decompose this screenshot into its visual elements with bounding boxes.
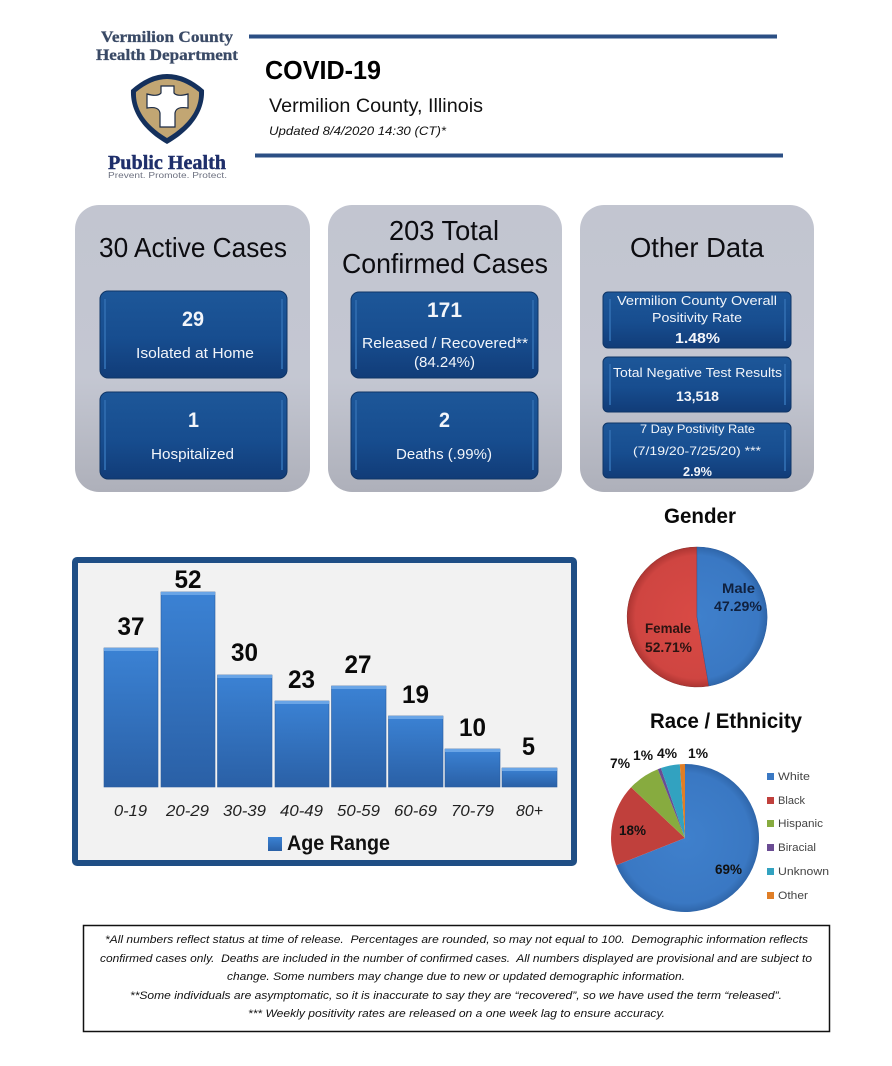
- stat box: released / recovered: (84.24%): [414, 355, 475, 371]
- value labels: [118, 566, 535, 761]
- chart: gender pie: [627, 547, 767, 687]
- slice: black: [611, 787, 685, 865]
- logo text: Public Health: Prevent. Promote. Protect.: [108, 171, 227, 180]
- panel heading: [342, 215, 548, 279]
- label: female: 52.71%: [645, 639, 693, 655]
- bars: [104, 592, 557, 787]
- pie legend: [767, 771, 829, 902]
- stat box: overall positivity rate: Vermilion County Overall: [617, 293, 777, 308]
- chart: age range bar chart: [75, 560, 574, 863]
- label: female: Female: [645, 620, 691, 636]
- slice: female: [627, 547, 709, 687]
- stat box: total negative test results: Total Negative Test Results: [613, 365, 783, 380]
- value labels: 5: [522, 733, 535, 761]
- header rule top: [249, 34, 777, 38]
- value labels: 10: [459, 714, 486, 742]
- pie legend: Hispanic: [778, 818, 824, 830]
- stat box: deaths: Deaths (.99%): [396, 447, 492, 463]
- stat box: isolated at home: Isolated at Home: [136, 346, 254, 362]
- pie labels: 1%: [688, 746, 708, 761]
- axis labels: 40-49: [280, 803, 323, 820]
- pie legend: Black: [778, 795, 805, 807]
- slice: white: [616, 764, 759, 912]
- pie legend: Unknown: [778, 866, 829, 878]
- footnotes box: [84, 926, 830, 1032]
- axis labels: 80+: [516, 803, 543, 820]
- pie labels: 69%: [715, 862, 742, 877]
- value labels: 27: [344, 651, 372, 679]
- header rule bottom: [255, 154, 783, 158]
- stat box: released / recovered: Released / Recovered**: [362, 336, 528, 352]
- pie legend: Other: [778, 890, 808, 902]
- label: male: 47.29%: [714, 598, 763, 614]
- slice: male: [697, 547, 767, 686]
- footnotes box: **Some individuals are asymptomatic, so it is inaccurate to say they are “recovered”, so we have used the term “released”.: [130, 990, 782, 1002]
- logo heading: Vermilion County: [101, 29, 233, 46]
- stat box: 7 day positivity rate: 7 Day Postivity Rate: [640, 422, 755, 436]
- heading: gender: Gender: [664, 505, 736, 528]
- stat box: deaths: 2: [439, 409, 450, 432]
- stat box: total negative test results: 13,518: [676, 389, 720, 404]
- panel heading: Confirmed Cases: [342, 248, 548, 279]
- value labels: 52: [174, 566, 202, 594]
- axis labels: 60-69: [394, 803, 437, 820]
- stat box: hospitalized: [100, 392, 287, 479]
- pie labels: 1%: [633, 748, 653, 763]
- logo text: Public Health: Public Health: [108, 152, 226, 174]
- slice: other: [680, 764, 685, 838]
- stat box: hospitalized: 1: [188, 409, 199, 432]
- axis labels: [114, 803, 543, 820]
- label: male: Male: [722, 580, 755, 596]
- title: COVID-19: [265, 55, 381, 85]
- pie labels: 7%: [610, 756, 630, 771]
- panel heading: 30 Active Cases: [99, 232, 287, 263]
- panel heading: Other Data: [630, 232, 764, 263]
- footnotes box: *All numbers reflect status at time of release. Percentages are rounded, so may not equal to 100. Demographic information reflects: [105, 934, 809, 946]
- panel: active cases: [75, 205, 310, 492]
- pie labels: 4%: [657, 746, 677, 761]
- axis labels: 20-29: [165, 803, 209, 820]
- value labels: 30: [231, 639, 258, 667]
- stat box: total negative test results: [603, 357, 791, 412]
- stat box: isolated at home: [100, 291, 287, 378]
- stat box: 7 day positivity rate: [603, 422, 791, 479]
- stat box: deaths: [351, 392, 538, 479]
- pie legend: White: [778, 771, 810, 783]
- footnotes box: confirmed cases only. Deaths are included in the number of confirmed cases. All numbers displayed are provisional and are subject to: [100, 953, 812, 965]
- slice: unknown: [661, 764, 685, 838]
- updated date: Updated 8/4/2020 14:30 (CT)*: [269, 124, 446, 138]
- slice: biracial: [658, 768, 685, 838]
- chart legend: Age Range: [287, 832, 390, 855]
- axis labels: 50-59: [337, 803, 380, 820]
- stat box: 7 day positivity rate: (7/19/20-7/25/20) ***: [633, 444, 761, 458]
- value labels: 19: [402, 681, 429, 709]
- panel: other data: [580, 205, 814, 492]
- slice: hispanic: [631, 769, 685, 838]
- pie legend: Biracial: [778, 842, 816, 854]
- label: male: [714, 580, 763, 614]
- axis labels: 30-39: [223, 803, 266, 820]
- stat box: released / recovered: [351, 292, 538, 378]
- chart: race pie: [610, 746, 829, 912]
- heading: race / ethnicity: Race / Ethnicity: [650, 710, 802, 733]
- pie labels: [610, 746, 742, 877]
- logo: Vermilion County Health Department: [96, 29, 239, 180]
- logo heading: [96, 29, 239, 64]
- stat box: overall positivity rate: 1.48%: [675, 331, 720, 347]
- stat box: overall positivity rate: Positivity Rate: [652, 310, 742, 325]
- panel: total confirmed cases: [328, 205, 562, 492]
- value labels: 23: [288, 666, 315, 694]
- bar highlights: [104, 592, 557, 771]
- stat box: released / recovered: 171: [427, 299, 462, 322]
- value labels: 37: [118, 613, 144, 641]
- logo heading: Health Department: [96, 47, 239, 64]
- label: female: [645, 620, 693, 655]
- axis labels: 70-79: [451, 803, 494, 820]
- stat box: 7 day positivity rate: 2.9%: [683, 465, 712, 479]
- pie labels: 18%: [619, 823, 646, 838]
- panel heading: 203 Total: [389, 215, 499, 246]
- icon: shield with cross: [131, 74, 204, 144]
- stat box: isolated at home: 29: [182, 308, 204, 331]
- footnotes box: change. Some numbers may change due to new or updated demographic information.: [227, 971, 685, 983]
- footnotes box: *** Weekly positivity rates are released on a one week lag to ensure accuracy.: [248, 1008, 665, 1020]
- subtitle: Vermilion County, Illinois: [269, 96, 483, 117]
- stat box: hospitalized: Hospitalized: [151, 447, 234, 463]
- stat box: overall positivity rate: [603, 292, 791, 348]
- axis labels: 0-19: [114, 803, 147, 820]
